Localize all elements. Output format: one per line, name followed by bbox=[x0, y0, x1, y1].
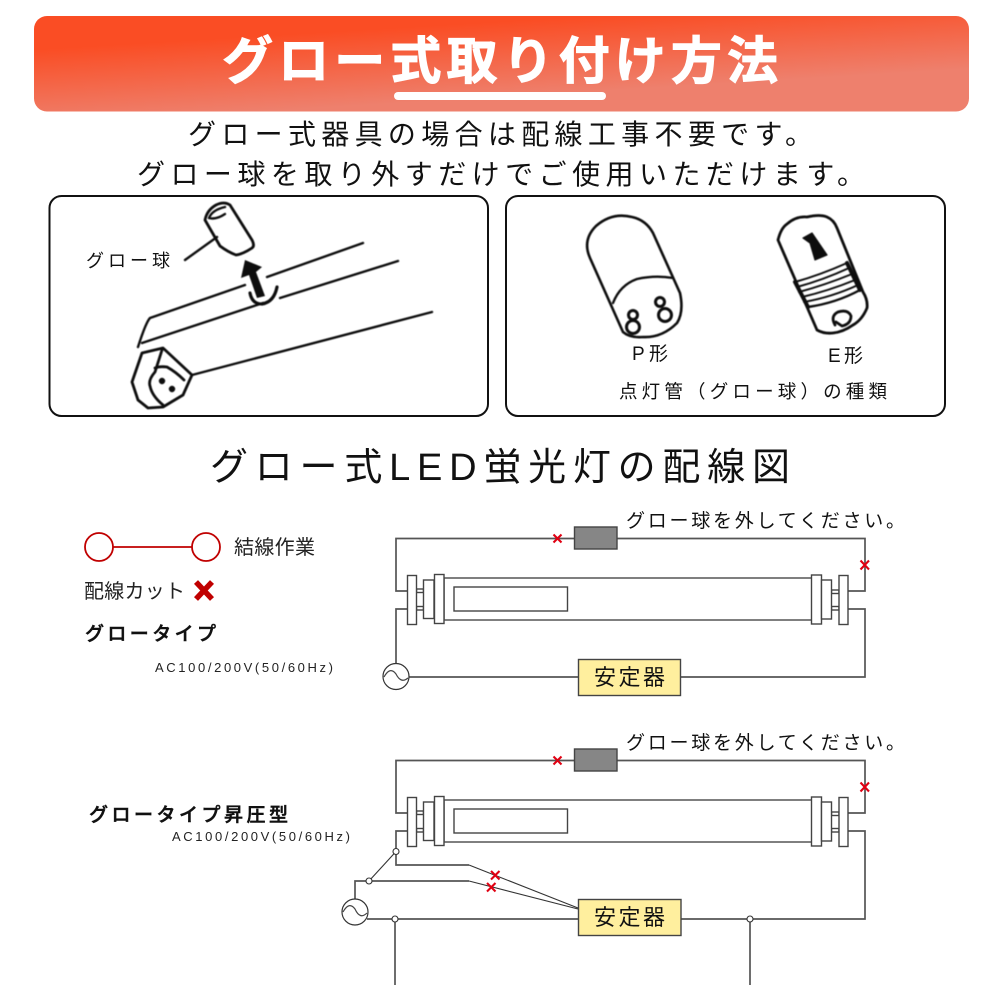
label: P type: P形 bbox=[632, 343, 668, 365]
cut marks bbox=[554, 534, 869, 570]
title underline bbox=[394, 92, 606, 100]
AC source bbox=[383, 664, 409, 690]
panel: glow bulb removal bbox=[50, 196, 488, 416]
ballast: 安定器 bbox=[594, 905, 665, 930]
label: glow type step-up: AC100/200V(50/60Hz) bbox=[172, 829, 350, 844]
note: remove glow bulb 1: グロー球を外してください。 bbox=[626, 510, 905, 532]
ballast bbox=[578, 900, 681, 936]
wiring diagram: glow type step-up bbox=[342, 749, 869, 985]
intro text: グロー球を取り外すだけでご使用いただけます。 bbox=[137, 159, 865, 190]
note: remove glow bulb 2: グロー球を外してください。 bbox=[626, 732, 905, 754]
icon: P type bulb bbox=[587, 216, 681, 337]
AC source bbox=[342, 899, 368, 925]
label: glow type step-up: グロータイプ昇圧型 bbox=[89, 804, 288, 826]
junction nodes bbox=[366, 848, 753, 922]
section heading: グロー式LED蛍光灯の配線図 bbox=[210, 447, 790, 489]
label: glow type: AC100/200V(50/60Hz) bbox=[155, 660, 333, 675]
lamp tube bbox=[408, 796, 848, 846]
label: glow type: グロータイプ bbox=[85, 623, 216, 645]
arrow: pull up bbox=[241, 260, 265, 298]
label: E type: E形 bbox=[828, 345, 863, 367]
caption: bulb types: 点灯管（グロー球）の種類 bbox=[619, 381, 887, 402]
label: glow bulb: グロー球 bbox=[86, 251, 170, 271]
header banner bbox=[34, 16, 969, 112]
label: glow type step-up bbox=[89, 804, 350, 844]
panel: glow bulb types bbox=[506, 196, 945, 416]
icon: fixture sketch bbox=[132, 203, 432, 408]
lamp tube bbox=[408, 574, 848, 624]
legend: connection work: 結線作業 bbox=[234, 536, 315, 559]
ballast bbox=[578, 660, 680, 696]
title: グロー式取り付け方法 bbox=[222, 33, 778, 90]
glow bulb box bbox=[574, 527, 617, 549]
cut marks bbox=[487, 756, 869, 892]
label: glow type bbox=[85, 623, 333, 675]
intro text: グロー式器具の場合は配線工事不要です。 bbox=[188, 119, 813, 150]
wiring diagram: glow type bbox=[383, 527, 869, 696]
icon: E type bulb bbox=[778, 216, 867, 333]
legend: wire cut: 配線カット bbox=[84, 580, 185, 603]
ballast: 安定器 bbox=[594, 665, 665, 690]
intro text bbox=[137, 119, 865, 190]
legend: connection work bbox=[85, 533, 315, 561]
glow bulb box bbox=[574, 749, 617, 771]
